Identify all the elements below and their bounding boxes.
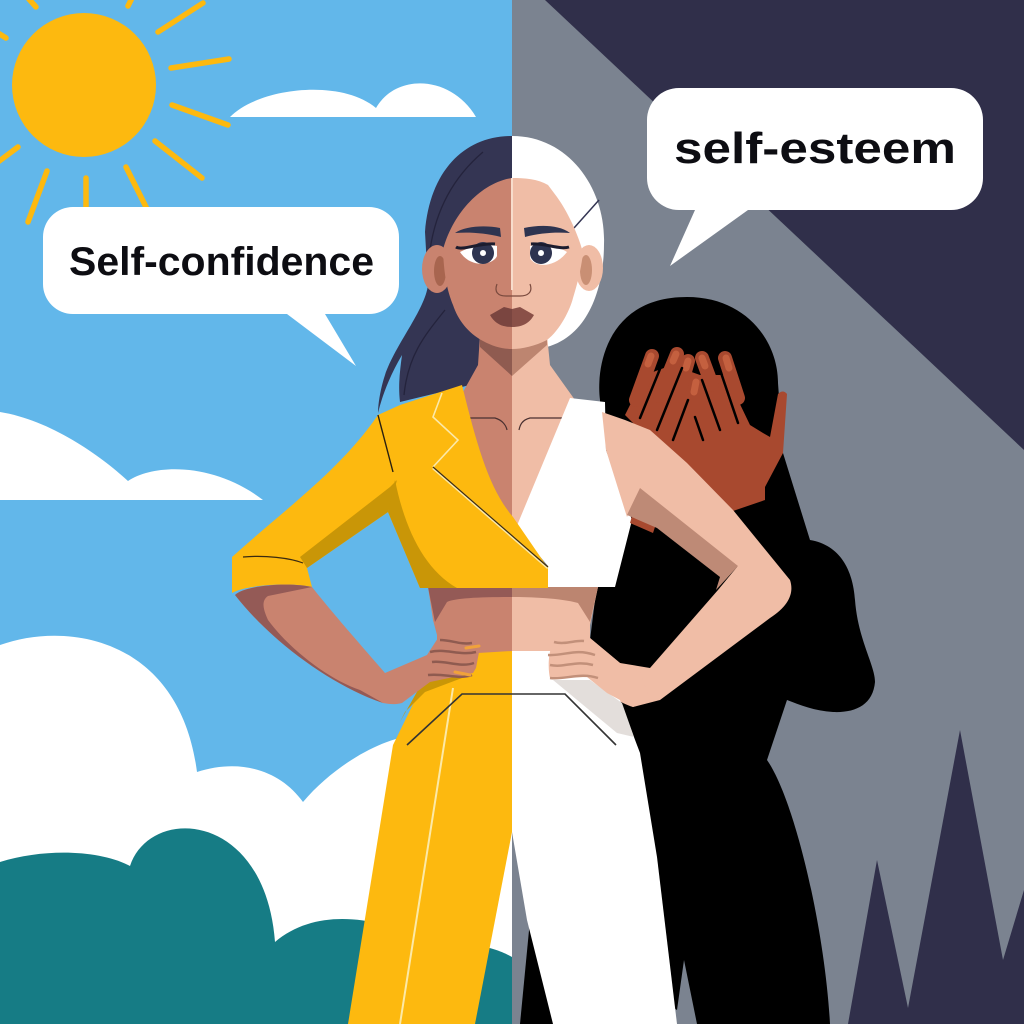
icon: sun with rays: [0, 0, 229, 222]
white crop top: [516, 398, 632, 587]
dark mountain spikes: [848, 730, 1024, 1024]
eye: left: [456, 242, 497, 264]
silhouette: shadow figure: [520, 297, 875, 1024]
neck and chest: right skin: [512, 335, 575, 532]
neck shadow: [480, 335, 547, 376]
eye: right: [530, 242, 569, 265]
hair: dark left half: [378, 136, 512, 413]
sleeve shadow: [300, 480, 397, 568]
face: left half: [443, 178, 512, 349]
panel: sunny sky background: [0, 0, 512, 1024]
speech bubble: Self-confidence: [43, 207, 399, 366]
cloud: top: [230, 83, 476, 117]
yellow trousers: [348, 651, 512, 1024]
cloud: large bottom: [0, 636, 512, 1024]
cloud: left: [0, 412, 263, 500]
waist seam: [407, 694, 616, 745]
ear: left: [422, 245, 452, 293]
speech bubble: self-esteem: self-esteem: [674, 124, 956, 173]
lips: [490, 307, 534, 327]
collarbone lines: [464, 418, 571, 430]
yellow jacket: [232, 385, 548, 593]
hair strands: [404, 152, 483, 395]
panel: grey background: [512, 0, 1024, 1024]
seam and lapel lines: [378, 415, 393, 472]
neck and chest: left skin: [445, 335, 512, 532]
arm shadow: [235, 585, 383, 703]
finger lines left: [428, 640, 476, 677]
face: right half: [512, 178, 583, 349]
speech bubble: self-esteem: [647, 88, 983, 266]
hair strand: [574, 200, 599, 228]
finger lines right: [548, 641, 598, 678]
trouser crease: [400, 688, 453, 1024]
right hand fill: [549, 638, 650, 707]
trouser shadow: yellow: [400, 675, 462, 722]
trouser shadow: [553, 680, 634, 737]
ear: right: [575, 245, 603, 291]
arm shadow band: [627, 488, 738, 590]
eyebrows: [455, 226, 570, 237]
body shadow: [388, 480, 457, 588]
icon: covering hands: [625, 354, 787, 511]
hills: teal foliage: [0, 828, 512, 1024]
fingertip accents: [455, 646, 479, 675]
red hand fragment: [630, 512, 655, 533]
white trousers: [512, 651, 677, 1024]
left arm: [235, 585, 480, 704]
right arm: [549, 412, 791, 707]
hair: white right half: [512, 136, 604, 347]
dark diagonal panel: [545, 0, 1024, 450]
waist: [428, 587, 598, 655]
nose: [496, 284, 531, 296]
speech bubble: Self-confidence: Self-confidence: [69, 240, 374, 284]
face centre line: [511, 178, 513, 290]
